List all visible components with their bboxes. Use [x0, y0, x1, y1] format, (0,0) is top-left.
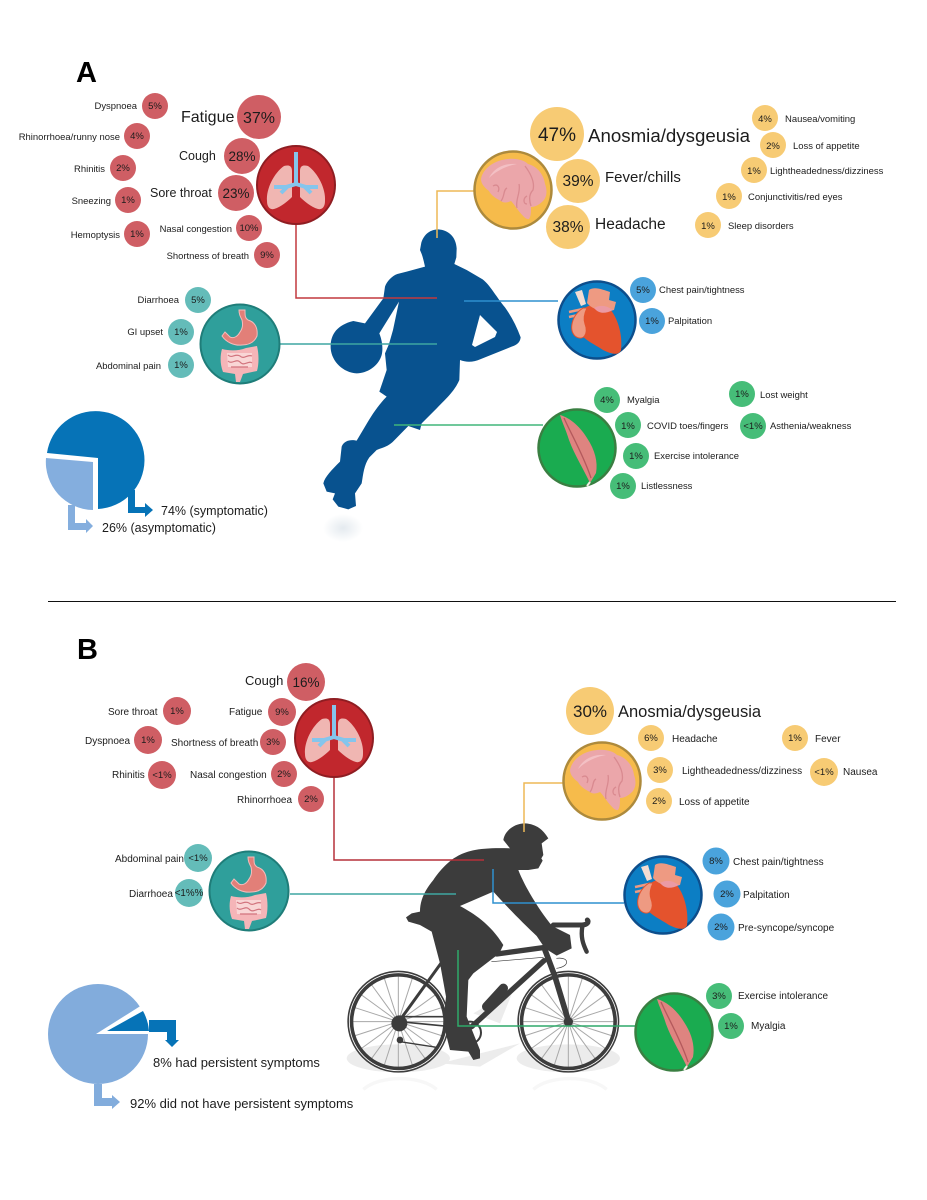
Asthenia 1% — [740, 413, 852, 439]
panel A: athlete silhouette — [323, 229, 521, 542]
panel B: cyclist silhouette — [347, 823, 620, 1089]
Pre-syncope 2%: Pre-syncope/syncope — [738, 923, 835, 934]
Chest pain 5%: 5% — [636, 285, 650, 296]
Shortness of breath 3% — [171, 729, 286, 755]
panel B: gastrointestinal symptoms — [115, 844, 288, 930]
Myalgia 4%: 4% — [600, 395, 614, 406]
Lost weight 1%: Lost weight — [760, 390, 808, 401]
Lost weight 1% — [729, 381, 808, 407]
ground shadows — [347, 990, 620, 1072]
arrow: symptomatic — [128, 490, 153, 517]
Myalgia 1%: Myalgia — [751, 1021, 786, 1032]
arrow: persistent — [149, 1020, 179, 1047]
Listlessness 1%: 1% — [616, 481, 630, 492]
pie chart A: symptomatic vs asymptomatic — [46, 411, 268, 535]
connector: lungs to chest (A) — [296, 225, 437, 298]
Sore throat 1%: 1% — [170, 706, 184, 717]
icon: lungs — [257, 146, 335, 224]
Abdominal pain <1%: <1% — [188, 853, 208, 864]
Abdominal pain <1%: Abdominal pain — [115, 854, 184, 865]
Nausea <1%: <1% — [814, 767, 834, 778]
label: not persistent: 92% did not have persistent symptoms — [130, 1096, 354, 1111]
Dyspnoea 5%: 5% — [148, 101, 162, 112]
Headache 6% — [638, 725, 718, 751]
Lightheadedness 1%: 1% — [747, 166, 761, 177]
panel A: cardiac symptoms — [558, 277, 745, 358]
Sore throat 23%: 23% — [222, 186, 250, 201]
connector: lungs to chest (B) — [334, 778, 484, 860]
Diarrhoea <1%: Diarrhoea — [129, 889, 173, 900]
Abdominal pain 1%: Abdominal pain — [96, 361, 161, 372]
arrow: asymptomatic — [68, 505, 93, 533]
connector: heart to chest (B) — [493, 869, 624, 903]
Fatigue 37%: Fatigue — [181, 109, 234, 126]
Sneezing 1%: Sneezing — [72, 196, 111, 207]
Rhinorrhoea 4% — [19, 123, 150, 149]
Listlessness 1%: Listlessness — [641, 481, 693, 492]
divider — [48, 600, 896, 602]
Headache 38%: Headache — [595, 216, 666, 233]
Conjunctivitis 1%: Conjunctivitis/red eyes — [748, 192, 843, 203]
Fever/chills 39% — [556, 159, 681, 203]
panel B: respiratory symptoms — [85, 663, 373, 812]
Nasal congestion 10%: Nasal congestion — [160, 224, 232, 235]
Loss of appetite 2%: Loss of appetite — [793, 141, 860, 152]
Anosmia/dysgeusia 47% — [530, 107, 751, 161]
Rhinorrhoea 2% — [237, 786, 324, 812]
Sore throat 1% — [108, 697, 191, 725]
Chest pain 5%: Chest pain/tightness — [659, 285, 745, 296]
Hemoptysis 1%: 1% — [130, 229, 144, 240]
Hemoptysis 1% — [71, 221, 150, 247]
Palpitation 1%: Palpitation — [668, 316, 712, 327]
Nasal congestion 2%: Nasal congestion — [190, 770, 267, 781]
Cough 16%: Cough — [245, 673, 283, 688]
Exercise intolerance 3% — [706, 983, 828, 1009]
Rhinitis 2% — [74, 155, 136, 181]
Shortness of breath 9%: Shortness of breath — [167, 251, 249, 262]
Nasal congestion 10% — [160, 215, 262, 241]
Fever 1%: 1% — [788, 733, 802, 744]
connector: heart to chest (A) — [464, 300, 558, 302]
front wheel — [519, 973, 617, 1071]
Lightheadedness 1% — [741, 157, 884, 183]
icon: heart — [558, 282, 636, 358]
Nasal congestion 2% — [190, 761, 297, 787]
rear derailleur — [391, 1015, 437, 1047]
Cough 28%: Cough — [179, 149, 216, 163]
icon: brain — [564, 742, 640, 820]
icon: lungs — [295, 699, 373, 777]
Fatigue 9%: 9% — [275, 707, 289, 718]
icon: digestive tract — [210, 852, 288, 930]
Cough 28% — [179, 138, 260, 174]
Abdominal pain <1% — [115, 844, 212, 872]
Sore throat 23%: Sore throat — [150, 186, 212, 200]
COVID toes 1% — [615, 412, 729, 438]
Dyspnoea 1%: Dyspnoea — [85, 736, 130, 747]
Diarrhoea 5%: 5% — [191, 295, 205, 306]
GI upset 1% — [127, 319, 194, 345]
Pre-syncope 2%: 2% — [714, 922, 728, 933]
Headache 38%: 38% — [552, 219, 584, 236]
Myalgia 4% — [594, 387, 660, 413]
COVID toes 1%: 1% — [621, 421, 635, 432]
Sneezing 1%: 1% — [121, 195, 135, 206]
Nausea/vomiting 4%: Nausea/vomiting — [785, 114, 855, 125]
Headache 38% — [546, 205, 666, 249]
Chest pain 8% — [702, 848, 824, 874]
Rhinorrhoea 4%: Rhinorrhoea/runny nose — [19, 132, 120, 143]
heading: panel A label: A — [76, 57, 97, 89]
Palpitation 1% — [639, 308, 712, 334]
Rhinitis <1%: <1% — [152, 770, 172, 781]
Diarrhoea <1%: <1%% — [175, 888, 204, 899]
icon: digestive tract — [200, 304, 280, 384]
Nausea <1% — [810, 758, 878, 786]
connector: brain to head (B) — [524, 783, 563, 832]
connector: muscle to thigh (A) — [394, 424, 543, 426]
label: asymptomatic: 26% (asymptomatic) — [102, 521, 216, 535]
Loss of appetite 2%: 2% — [766, 141, 780, 152]
Lightheadedness 3%: 3% — [653, 765, 667, 776]
Shortness of breath 3%: Shortness of breath — [171, 738, 258, 749]
Fatigue 9%: Fatigue — [229, 707, 263, 718]
Rhinitis 2%: 2% — [116, 163, 130, 174]
Anosmia/dysgeusia 47%: Anosmia/dysgeusia — [588, 125, 751, 146]
Sleep disorders 1%: Sleep disorders — [728, 221, 794, 232]
panel A: respiratory symptoms — [19, 93, 335, 268]
Exercise intolerance 1%: 1% — [629, 451, 643, 462]
GI upset 1%: 1% — [174, 327, 188, 338]
Rhinorrhoea 2%: 2% — [304, 794, 318, 805]
Headache 6%: 6% — [644, 733, 658, 744]
COVID toes 1%: COVID toes/fingers — [647, 421, 729, 432]
Lost weight 1%: 1% — [735, 389, 749, 400]
Abdominal pain 1% — [96, 352, 194, 378]
Fever/chills 39%: 39% — [562, 173, 594, 190]
Sleep disorders 1% — [695, 212, 794, 238]
connector: gut to abdomen (A) — [280, 343, 437, 345]
Fatigue 9% — [229, 698, 296, 726]
icon: muscle — [636, 994, 712, 1070]
panel B: musculoskeletal symptoms — [636, 983, 828, 1070]
Rhinitis 2%: Rhinitis — [74, 164, 105, 175]
Dyspnoea 5%: Dyspnoea — [94, 101, 138, 112]
Nasal congestion 10%: 10% — [239, 223, 259, 234]
Cough 28%: 28% — [228, 149, 256, 164]
Loss of appetite 2%: Loss of appetite — [679, 797, 750, 808]
Palpitation 2% — [714, 880, 790, 908]
panel A: musculoskeletal symptoms — [538, 381, 852, 499]
Asthenia 1%: Asthenia/weakness — [770, 421, 852, 432]
panel B: cardiac symptoms — [624, 848, 835, 940]
Shortness of breath 3%: 3% — [266, 737, 280, 748]
Nausea/vomiting 4% — [752, 105, 855, 131]
Abdominal pain 1%: 1% — [174, 360, 188, 371]
Rhinitis <1%: Rhinitis — [112, 770, 145, 781]
label: persistent: 8% had persistent symptoms — [153, 1055, 320, 1070]
Cough 16%: 16% — [292, 675, 320, 690]
wheel reflections — [363, 1079, 607, 1089]
Nasal congestion 2%: 2% — [277, 769, 291, 780]
Fatigue 37%: 37% — [243, 110, 275, 127]
Palpitation 2%: 2% — [720, 889, 734, 900]
Diarrhoea 5% — [138, 287, 211, 313]
Loss of appetite 2% — [646, 788, 750, 814]
Cough 16% — [245, 663, 325, 701]
rider body — [406, 823, 572, 1060]
Asthenia 1%: <1% — [743, 421, 763, 432]
Anosmia/dysgeusia 47%: 47% — [538, 125, 576, 146]
Fatigue 37% — [181, 95, 281, 139]
Chest pain 8%: Chest pain/tightness — [733, 857, 824, 868]
Headache 6%: Headache — [672, 734, 718, 745]
Dyspnoea 5% — [94, 93, 168, 119]
connector: muscle to leg (B) — [458, 950, 635, 1026]
heading: panel B label: B — [77, 634, 98, 666]
panel A: neurological symptoms — [474, 105, 884, 249]
rear wheel — [349, 973, 447, 1071]
Diarrhoea <1% — [129, 879, 204, 907]
icon: brain — [474, 152, 552, 228]
Rhinitis <1% — [112, 761, 176, 789]
Anosmia/dysgeusia 30%: Anosmia/dysgeusia — [618, 703, 762, 721]
Rhinorrhoea 4%: 4% — [130, 131, 144, 142]
connector: brain to head (A) — [437, 191, 474, 238]
Fever/chills 39%: Fever/chills — [605, 169, 681, 186]
panel B: neurological symptoms — [564, 687, 878, 820]
Hemoptysis 1%: Hemoptysis — [71, 230, 120, 241]
connector: gut to abdomen (B) — [290, 893, 456, 895]
Anosmia/dysgeusia 30% — [566, 687, 762, 735]
Loss of appetite 2% — [760, 132, 860, 158]
Fever 1%: Fever — [815, 734, 841, 745]
Myalgia 1% — [718, 1013, 786, 1039]
Lightheadedness 3%: Lightheadedness/dizziness — [682, 766, 802, 777]
Chest pain 8%: 8% — [709, 856, 723, 867]
Exercise intolerance 3%: 3% — [712, 991, 726, 1002]
Conjunctivitis 1%: 1% — [722, 192, 736, 203]
Exercise intolerance 1%: Exercise intolerance — [654, 451, 739, 462]
Exercise intolerance 1% — [623, 443, 739, 469]
Nausea <1%: Nausea — [843, 767, 878, 778]
arrow: not persistent — [94, 1084, 120, 1109]
Sleep disorders 1%: 1% — [701, 221, 715, 232]
Sore throat 23% — [150, 175, 254, 211]
Listlessness 1% — [610, 473, 693, 499]
icon: muscle — [538, 410, 616, 486]
Pre-syncope 2% — [708, 914, 835, 940]
icon: heart — [624, 856, 702, 934]
Conjunctivitis 1% — [716, 183, 843, 209]
Dyspnoea 1%: 1% — [141, 735, 155, 746]
Sneezing 1% — [72, 187, 141, 213]
Anosmia/dysgeusia 30%: 30% — [573, 702, 607, 721]
Chest pain 5% — [630, 277, 745, 303]
Diarrhoea 5%: Diarrhoea — [138, 295, 180, 306]
Myalgia 1%: 1% — [724, 1021, 738, 1032]
Palpitation 1%: 1% — [645, 316, 659, 327]
panel A: gastrointestinal symptoms — [96, 287, 280, 384]
Nausea/vomiting 4%: 4% — [758, 114, 772, 125]
label: symptomatic: 74% (symptomatic) — [161, 504, 268, 518]
Lightheadedness 1%: Lightheadedness/dizziness — [770, 166, 884, 177]
Dyspnoea 1% — [85, 726, 162, 754]
bicycle frame — [400, 920, 588, 1044]
Myalgia 4%: Myalgia — [627, 395, 660, 406]
Shortness of breath 9% — [167, 242, 280, 268]
Loss of appetite 2%: 2% — [652, 796, 666, 807]
Exercise intolerance 3%: Exercise intolerance — [738, 991, 828, 1002]
Lightheadedness 3% — [647, 757, 802, 783]
Sore throat 1%: Sore throat — [108, 707, 158, 718]
GI upset 1%: GI upset — [127, 327, 163, 338]
Rhinorrhoea 2%: Rhinorrhoea — [237, 795, 292, 806]
pie chart B: persistent symptoms — [48, 984, 354, 1111]
Shortness of breath 9%: 9% — [260, 250, 274, 261]
Palpitation 2%: Palpitation — [743, 890, 790, 901]
Fever 1% — [782, 725, 841, 751]
